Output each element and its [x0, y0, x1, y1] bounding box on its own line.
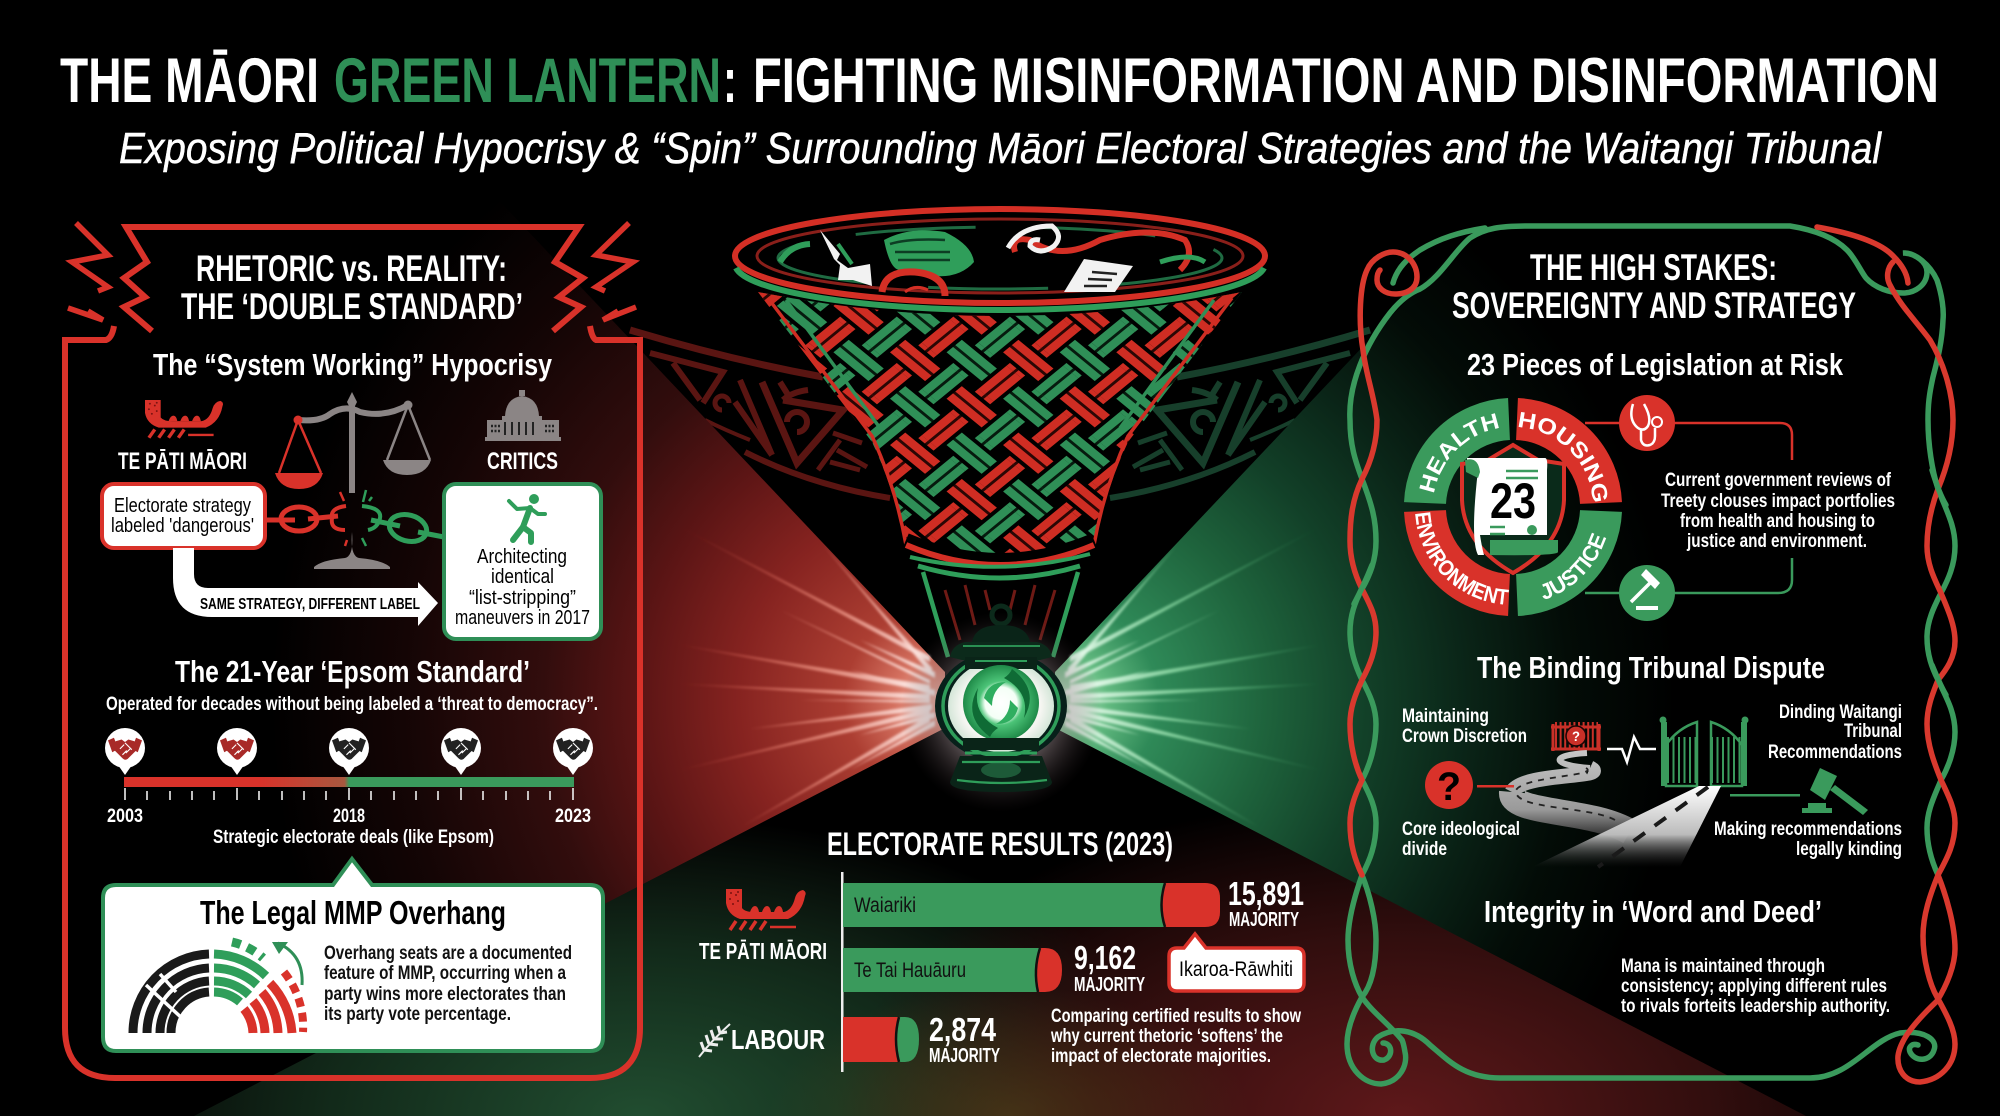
- background band: left carved pattern: [630, 330, 890, 498]
- icon: running figure: [509, 494, 545, 542]
- heading: system working: The “System Working” Hypocrisy: [153, 347, 553, 382]
- connector lines: [1585, 423, 1792, 593]
- logo: labour: LABOUR: [731, 1024, 825, 1055]
- icon: pulse: [1607, 737, 1656, 762]
- red left strand: [1350, 252, 1417, 875]
- chart: parliament seats: [133, 942, 303, 1033]
- icon: red gate: [1551, 724, 1601, 751]
- bar: waiariki: Waiariki: [854, 894, 916, 917]
- icon: shield and scroll: [1462, 445, 1564, 573]
- text: overhang: feature of MMP, occurring when a: [324, 963, 566, 984]
- box: list stripping: maneuvers in 2017: [455, 607, 590, 629]
- callout: legal MMP overhang: [103, 859, 603, 1051]
- icon: winding road: [1512, 753, 1630, 832]
- panel heading: SOVEREIGNTY AND STRATEGY: [1452, 285, 1856, 326]
- lantern: [901, 606, 1101, 812]
- green spiral and bottom line: [1372, 1031, 1935, 1078]
- title: THE MĀORI: [60, 46, 319, 116]
- red light beam: [0, 172, 945, 1116]
- heading: epsom standard: The 21-Year ‘Epsom Standard’: [175, 654, 530, 689]
- background band: right carved pattern: [1110, 330, 1370, 498]
- green left overlay: [1354, 565, 1372, 604]
- text: comparing results: why current thetoric ‘softens’ the: [1050, 1026, 1283, 1047]
- panel heading: [1452, 247, 1856, 326]
- axis: [841, 872, 844, 1072]
- timeline: Strategic electorate deals (like Epsom): [213, 827, 494, 848]
- text: binding recommendations: Recommendations: [1768, 742, 1902, 763]
- bar: labour: 2,874: [929, 1011, 997, 1048]
- bar: waiariki: [843, 875, 1304, 931]
- bar: te tai hauauru: Te Tai Hauāuru: [854, 959, 966, 982]
- logo: te pati maori: [699, 889, 827, 964]
- green right overlay: [1932, 470, 1946, 695]
- text: government reviews: [1661, 470, 1895, 552]
- timeline: 2023: [555, 806, 591, 827]
- text: comparing results: [1050, 1006, 1301, 1067]
- text: binding recommendations: Tribunal: [1844, 721, 1902, 742]
- icon: lightning right: [596, 223, 636, 320]
- green left teardrop: [1347, 875, 1406, 1084]
- text: government reviews: justice and environment.: [1686, 531, 1867, 552]
- panel: rhetoric vs reality: [65, 223, 640, 1078]
- bar: te tai hauauru: 9,162: [1074, 939, 1136, 976]
- timeline: 2003: [107, 806, 143, 827]
- bar: labour: [843, 1011, 1000, 1067]
- ring: portfolios: [1404, 398, 1622, 616]
- text: comparing results: impact of electorate majorities.: [1051, 1046, 1271, 1067]
- icon: question mark: [1425, 761, 1514, 809]
- icon: stethoscope: [1619, 395, 1675, 451]
- panel frame: [65, 227, 640, 1078]
- text: binding recommendations: Dinding Waitangi: [1779, 702, 1902, 723]
- text: comparing results: Comparing certified results to show: [1051, 1006, 1301, 1027]
- bar: waiariki: MAJORITY: [1229, 909, 1299, 931]
- box: electorate strategy: [102, 484, 265, 548]
- text: core divide: divide: [1402, 839, 1447, 860]
- ring: portfolios: ENVIRONMENT: [1415, 512, 1509, 604]
- callout: legal MMP overhang: The Legal MMP Overhang: [200, 894, 506, 931]
- ring: portfolios: JUSTICE: [1542, 532, 1606, 599]
- bar: labour: MAJORITY: [929, 1045, 1000, 1067]
- icon: red gate: ?: [1572, 728, 1580, 744]
- box: list stripping: identical: [491, 566, 554, 588]
- rim contents: [780, 244, 810, 262]
- funnel: woven kete: [732, 206, 1268, 658]
- text: making binding: legally kinding: [1796, 839, 1902, 860]
- funnel edge ribbons: [768, 298, 1232, 545]
- icon: shield and scroll: 23: [1490, 473, 1536, 529]
- rim: [735, 209, 1265, 310]
- bar: te tai hauauru: [843, 939, 1145, 996]
- label: critics: CRITICS: [487, 448, 558, 475]
- ring: portfolios: HOUSING: [1518, 412, 1608, 502]
- woven body: [758, 292, 1242, 553]
- icon: question mark: ?: [1437, 765, 1461, 809]
- box: list stripping: Architecting: [477, 546, 567, 568]
- box: electorate strategy: Electorate strategy: [114, 495, 251, 517]
- heading: tribunal dispute: The Binding Tribunal Dispute: [1477, 650, 1825, 685]
- title: GREEN LANTERN: [334, 46, 721, 116]
- text: crown discretion: Crown Discretion: [1402, 726, 1527, 747]
- text: making binding: [1714, 819, 1902, 860]
- bar: waiariki: 15,891: [1228, 875, 1304, 912]
- text: mana: to rivals forteits leadership authority.: [1621, 996, 1890, 1017]
- icon: parliament: [485, 390, 561, 441]
- green hook top left: [1393, 228, 1485, 283]
- left braid and top line green: [1350, 226, 1955, 875]
- label: te pati maori: TE PĀTI MĀORI: [118, 448, 247, 475]
- arrow: same strategy: [173, 548, 438, 626]
- panel heading: THE ‘DOUBLE STANDARD’: [181, 286, 523, 327]
- arrow: same strategy: SAME STRATEGY, DIFFERENT LABEL: [200, 596, 420, 613]
- box: electorate strategy: labeled 'dangerous': [111, 515, 254, 537]
- text: government reviews: Treety clouses impact portfolies: [1661, 491, 1895, 512]
- green light beam: [1055, 172, 2000, 1116]
- lantern swirl: [963, 665, 1039, 741]
- callout: ikaroa-rawhiti: [1169, 934, 1304, 991]
- panel heading: [181, 248, 523, 327]
- lantern base: [950, 738, 1052, 792]
- text: overhang: Overhang seats are a documented: [324, 943, 572, 964]
- timeline: 2018: [333, 806, 365, 827]
- icon: green gates: [1660, 716, 1748, 786]
- logo: labour: [699, 1024, 825, 1057]
- lantern straps: [923, 572, 1078, 657]
- timeline bar: [124, 777, 574, 787]
- icon: gavel: [1619, 565, 1675, 621]
- text: overhang: party wins more electorates than: [324, 984, 566, 1005]
- red right strand: [1817, 227, 1955, 1082]
- text: overhang: its party vote percentage.: [324, 1004, 511, 1025]
- title: :: [723, 46, 737, 116]
- title: [60, 46, 1939, 116]
- text: operated for decades: Operated for decades without being labeled a ‘threat to democracy”.: [106, 694, 598, 715]
- braided frame: [1347, 226, 1955, 1084]
- text: core divide: [1402, 819, 1520, 860]
- text: government reviews: Current government reviews of: [1665, 470, 1892, 491]
- panel: electorate results: [699, 826, 1304, 1072]
- panel heading: THE HIGH STAKES:: [1530, 247, 1777, 288]
- icon: lightning left: [68, 223, 108, 320]
- broken chain: [265, 490, 444, 546]
- text: mana: Mana is maintained through: [1621, 956, 1825, 977]
- heading: integrity: Integrity in ‘Word and Deed’: [1484, 894, 1822, 929]
- text: making binding: Making recommendations: [1714, 819, 1902, 840]
- logo: te pati maori: TE PĀTI MĀORI: [699, 938, 827, 964]
- heading: ELECTORATE RESULTS (2023): [827, 826, 1173, 862]
- callout: ikaroa-rawhiti: Ikaroa-Rāwhiti: [1179, 958, 1293, 981]
- green lower left strand: [1348, 780, 1402, 1040]
- icon: scales: [275, 392, 431, 569]
- text: mana: consistency; applying different rules: [1621, 976, 1887, 997]
- panel: high stakes: [1344, 223, 1958, 1087]
- icon: straight road: [1532, 786, 1721, 867]
- text: crown discretion: [1402, 706, 1527, 747]
- timeline: [105, 728, 593, 848]
- text: crown discretion: Maintaining: [1402, 706, 1489, 727]
- text: overhang: [324, 943, 572, 1025]
- text: mana: [1621, 956, 1890, 1017]
- heading: legislation: 23 Pieces of Legislation at Risk: [1467, 347, 1844, 382]
- lower bands: [906, 540, 1094, 578]
- ring: portfolios: HEALTH: [1419, 413, 1499, 492]
- bar: te tai hauauru: MAJORITY: [1074, 974, 1145, 996]
- text: binding recommendations: [1768, 702, 1902, 763]
- text: government reviews: from health and housing to: [1680, 511, 1875, 532]
- box: list stripping: “list-stripping”: [469, 587, 576, 609]
- timeline pins: [105, 728, 593, 775]
- panel heading: RHETORIC vs. REALITY:: [196, 248, 507, 289]
- icon: gavel green: [1730, 768, 1868, 815]
- box: list stripping: [444, 484, 601, 639]
- text: core divide: Core ideological: [1402, 819, 1520, 840]
- icon: canoe: [145, 400, 223, 438]
- lantern cap: [950, 642, 1052, 669]
